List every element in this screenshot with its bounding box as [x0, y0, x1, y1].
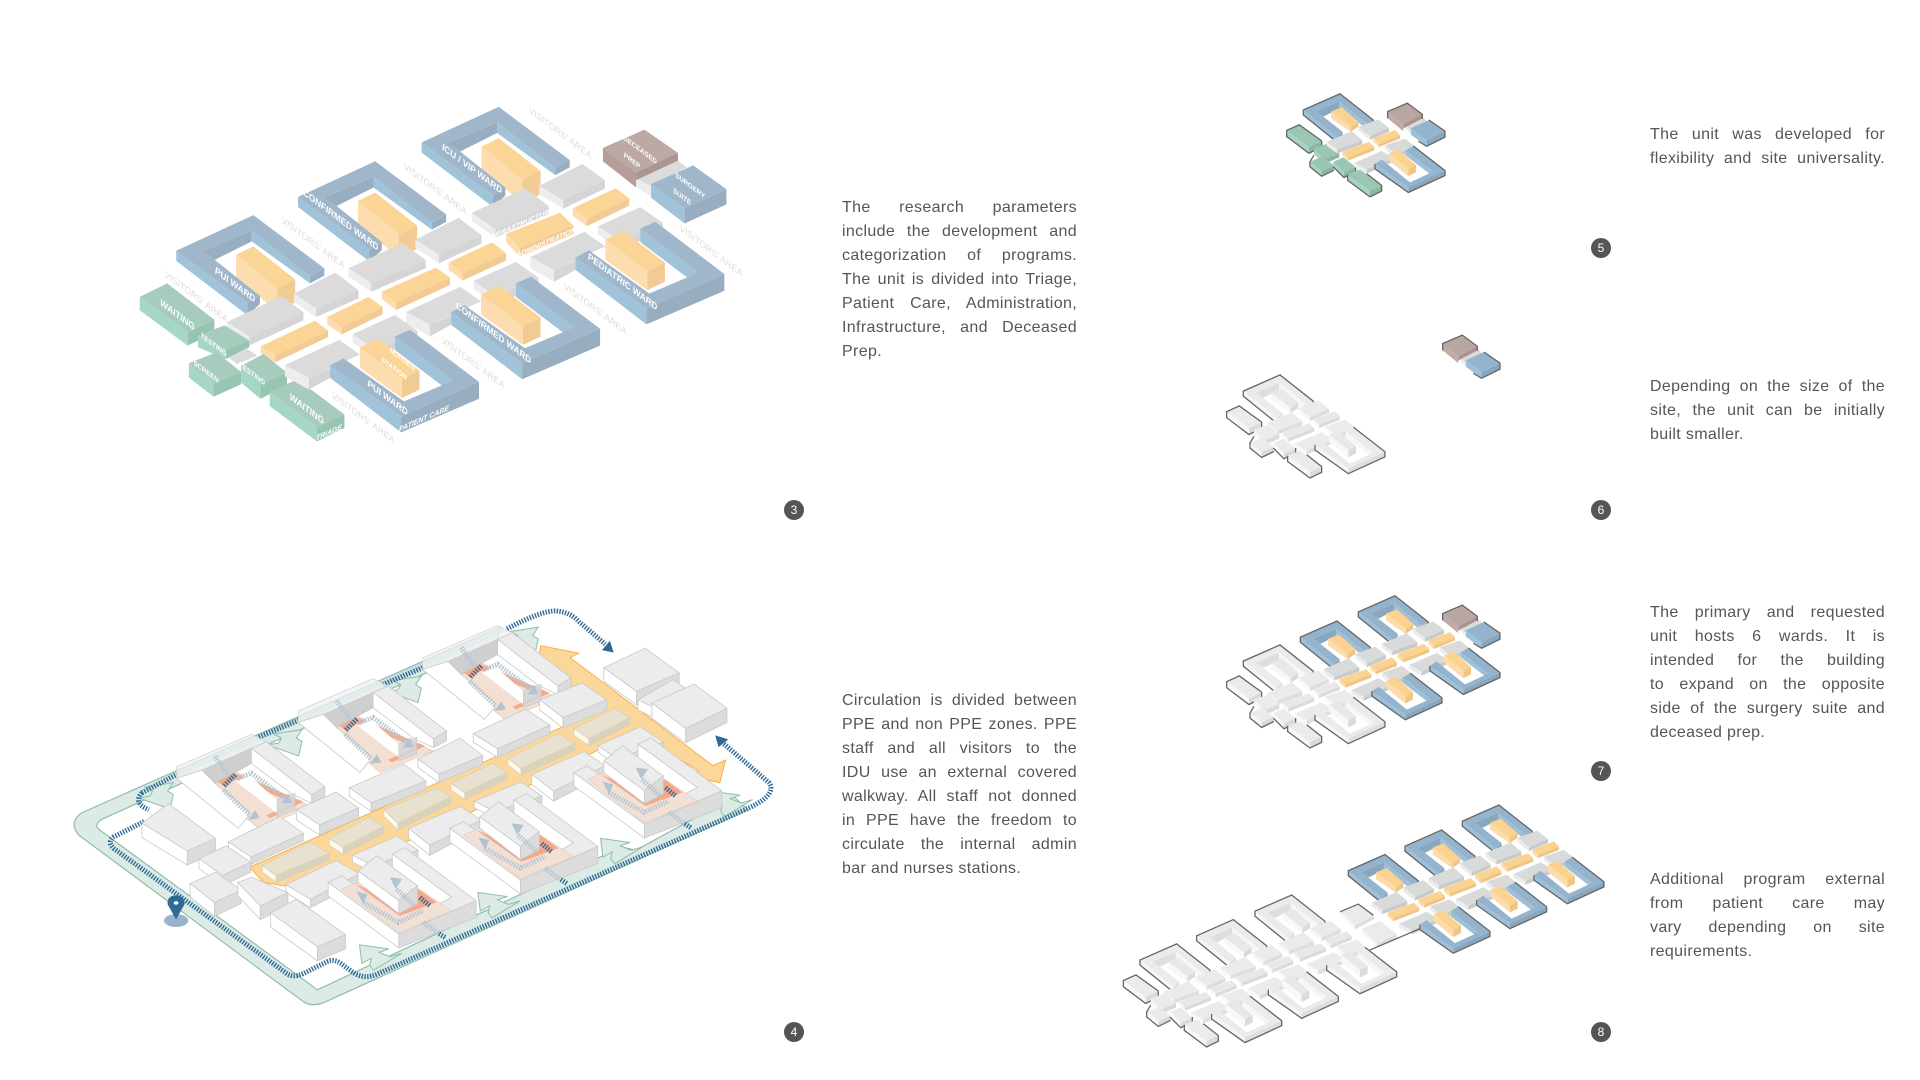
start pin: [164, 895, 188, 927]
ward and program labels: NURSES': [390, 345, 416, 374]
text: circulation: bar and nurses stations.: [842, 860, 1021, 877]
badge 3: 3: [791, 503, 797, 517]
ward and program labels: [160, 132, 706, 443]
text: flexibility: [1650, 126, 1885, 167]
text: initial size: Depending on the size of the: [1650, 378, 1885, 395]
badge 6: 6: [1598, 503, 1604, 517]
ward and program labels: SURGERY: [675, 170, 706, 202]
text: additional program: Additional program external: [1650, 871, 1885, 888]
text: circulation: IDU use an external covered: [842, 764, 1077, 781]
badge 4: [784, 1022, 804, 1042]
green covered walkway: [74, 627, 753, 1005]
ward and program labels: WAITING: [290, 391, 324, 428]
text: primary unit: to expand on the opposite: [1650, 676, 1885, 693]
badge 3: [784, 500, 804, 520]
text: circulation: staff and all visitors to the: [842, 740, 1077, 757]
badge 7: [1591, 761, 1611, 781]
ward and program labels: TRIAGE: [316, 422, 343, 443]
ward and program labels: SCREEN: [193, 358, 219, 386]
text: research parameters: [842, 199, 1077, 360]
text: circulation: Circulation is divided between: [842, 692, 1077, 709]
buildings and wards: [142, 625, 727, 961]
text: primary unit: The primary and requested: [1650, 604, 1885, 621]
diagram 8: expanded unit: [1123, 805, 1604, 1047]
deceased prep and surgery suite: [603, 130, 726, 224]
text: primary unit: deceased prep.: [1650, 724, 1765, 741]
ward and program labels: TESTING: [239, 359, 265, 388]
badge 5: [1591, 238, 1611, 258]
route arrowheads: [602, 641, 728, 747]
text: primary unit: [1650, 604, 1885, 741]
text: flexibility: The unit was developed for: [1650, 126, 1885, 143]
text: research parameters: Prep.: [842, 343, 882, 360]
ward and program labels: PEDIATRIC WARD: [588, 251, 657, 314]
text: primary unit: side of the surgery suite and: [1650, 700, 1885, 717]
ward and program labels: SUITE: [673, 185, 692, 208]
text: additional program: [1650, 871, 1885, 960]
ward and program labels: PREP: [624, 150, 641, 172]
text: additional program: requirements.: [1650, 943, 1752, 960]
text: primary unit: intended for the building: [1650, 652, 1885, 669]
badge 5: 5: [1598, 241, 1604, 255]
text: circulation: circulate the internal admin: [842, 836, 1077, 853]
diagram 4: circulation axonometric: [74, 611, 771, 1005]
visitors' area labels: VISITORS' AREA: [332, 390, 394, 448]
text: research parameters: Patient Care, Administration,: [842, 295, 1077, 312]
ward and program labels: PUI WARD: [215, 265, 255, 306]
visitors' area labels: VISITORS' AREA: [165, 269, 227, 327]
text: initial size: site, the unit can be initially: [1650, 402, 1885, 419]
diagram 7: six-ward unit: [1227, 596, 1500, 748]
badge 4: 4: [791, 1025, 797, 1039]
visitors' area labels: VISITORS' AREA: [680, 223, 742, 281]
visitors' area labels: VISITORS' AREA: [564, 281, 626, 339]
wards: PUI, confirmed and ICU: [176, 107, 570, 315]
text: research parameters: The unit is divided into Triage,: [842, 271, 1077, 288]
triage blocks: [140, 283, 344, 441]
ward and program labels: INFRASTRUCTURE: [490, 205, 555, 242]
visitors' area labels: VISITORS' AREA: [442, 335, 504, 393]
text: additional program: vary depending on site: [1650, 919, 1885, 936]
diagram 6: initial smaller unit: [1227, 335, 1500, 478]
administration blocks: [261, 188, 629, 362]
diagram 3: program axonometric: [140, 105, 742, 448]
text: research parameters: include the development and: [842, 223, 1077, 240]
ward and program labels: STATION: [381, 354, 407, 383]
orange admin circulation zone: [250, 646, 725, 887]
text: research parameters: categorization of programs.: [842, 247, 1077, 264]
text: initial size: built smaller.: [1650, 426, 1744, 443]
diagram 5: full unit with one bay: [1287, 94, 1445, 197]
visitors' area labels: [165, 105, 742, 448]
visitors' area labels: VISITORS' AREA: [282, 215, 344, 273]
text: primary unit: unit hosts 6 wards. It is: [1650, 628, 1885, 645]
ward and program labels: DECEASED: [623, 132, 657, 167]
badge 7: 7: [1598, 764, 1604, 778]
badge 8: [1591, 1022, 1611, 1042]
text: circulation: [842, 692, 1077, 877]
text: research parameters: Infrastructure, and Deceased: [842, 319, 1077, 336]
text: research parameters: The research parameters: [842, 199, 1077, 216]
ward and program labels: WAITING: [160, 297, 195, 334]
text: circulation: in PPE have the freedom to: [842, 812, 1077, 829]
ward and program labels: ICU / VIP WARD: [442, 142, 502, 197]
text: circulation: PPE and non PPE zones. PPE: [842, 716, 1077, 733]
badge 8: 8: [1598, 1025, 1604, 1039]
text: circulation: walkway. All staff not donned: [842, 788, 1077, 805]
visitors' area labels: VISITORS' AREA: [404, 161, 466, 219]
visitors' area labels: VISITORS' AREA: [529, 105, 591, 163]
ward and program labels: PATIENT CARE: [399, 403, 450, 434]
wards: pediatric, confirmed and PUI: [285, 207, 724, 432]
ward and program labels: CONFIRMED WARD: [303, 187, 378, 254]
ward and program labels: CONFIRMED WARD: [456, 300, 531, 367]
ward and program labels: PUI WARD: [367, 378, 408, 419]
ward and program labels: TESTING: [200, 330, 227, 359]
ward and program labels: ADMINISTRATION: [515, 225, 576, 260]
blue route: [110, 611, 771, 977]
text: additional program: from patient care may: [1650, 895, 1885, 912]
infrastructure blocks: [227, 164, 605, 346]
text: initial size: [1650, 378, 1885, 443]
text: flexibility: flexibility and site universality.: [1650, 150, 1885, 167]
badge 6: [1591, 500, 1611, 520]
